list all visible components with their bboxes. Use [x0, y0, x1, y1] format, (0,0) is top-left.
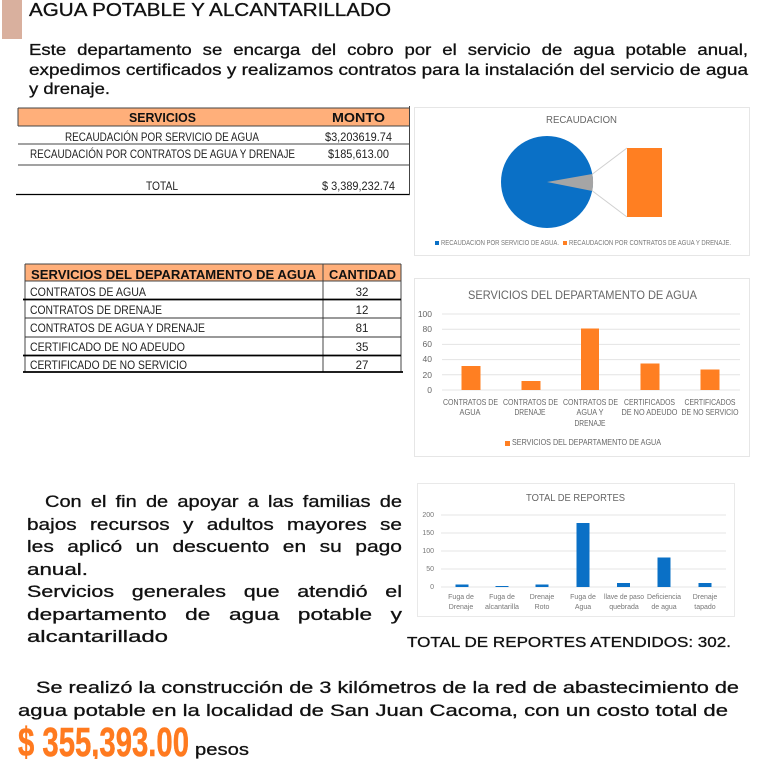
table: servicios y monto: $3,203619.74	[325, 132, 393, 144]
table: servicios del departamento de agua: CONTRATOS DE AGUA	[30, 287, 146, 299]
bar chart: servicios del departamento de agua: 40	[423, 354, 432, 364]
table: servicios del departamento de agua: 32	[356, 287, 368, 299]
bar chart: total de reportes: quebrada	[609, 604, 639, 611]
bar chart: servicios del departamento de agua	[414, 278, 750, 456]
bar chart: servicios del departamento de agua: AGUA	[460, 407, 481, 417]
closing paragraph	[18, 679, 739, 720]
bar chart: servicios del departamento de agua: 60	[423, 339, 432, 349]
bar chart: total de reportes: llave de paso	[604, 594, 644, 601]
intro paragraph: expedimos certificados y realizamos contratos para la instalación del servicio de agua	[29, 62, 748, 79]
pie chart: recaudacion: RECAUDACION POR SERVICIO DE AGUA.	[441, 240, 559, 247]
table: servicios y monto	[16, 106, 410, 195]
bar chart: servicios del departamento de agua: 0	[427, 385, 432, 395]
bar chart: total de reportes: 150	[422, 530, 434, 537]
pie chart: recaudacion	[414, 108, 750, 256]
table: servicios y monto: $185,613.00	[328, 149, 389, 161]
closing paragraph: agua potable en la localidad de San Juan Cacoma, con un costo total de	[18, 702, 728, 720]
table: servicios del departamento de agua: CANTIDAD	[329, 268, 396, 282]
bar chart: total de reportes: Drenaje	[693, 594, 717, 601]
intro paragraph	[29, 42, 748, 98]
table: servicios del departamento de agua: CONTRATOS DE AGUA Y DRENAJE	[30, 323, 205, 335]
text block: apoyo a familias y servicios generales: Con el fin de apoyar a las familias de	[45, 493, 402, 511]
table: servicios del departamento de agua	[23, 264, 403, 372]
bar chart: total de reportes: Fuga de	[489, 594, 515, 601]
bar chart: servicios del departamento de agua: CERTIFICADOS	[624, 397, 675, 407]
pie chart: recaudacion: RECAUDACION POR CONTRATOS DE AGUA Y DRENAJE.	[569, 240, 731, 247]
table: servicios del departamento de agua: 12	[356, 305, 368, 317]
table: servicios del departamento de agua: 27	[356, 360, 368, 372]
bar chart: total de reportes: 100	[422, 548, 434, 555]
bar chart: total de reportes: 200	[422, 512, 434, 519]
table: servicios del departamento de agua: CONTRATOS DE DRENAJE	[30, 305, 162, 317]
bar chart: servicios del departamento de agua: CONTRATOS DE	[503, 397, 558, 407]
table: servicios del departamento de agua: SERVICIOS DEL DEPARATAMENTO DE AGUA	[31, 268, 316, 282]
bar chart: total de reportes: alcantarilla	[485, 604, 519, 611]
title: AGUA POTABLE Y ALCANTARILLADO	[29, 0, 391, 20]
table: servicios y monto: TOTAL	[146, 181, 179, 193]
bar chart: servicios del departamento de agua: DE NO ADEUDO	[622, 407, 678, 417]
bar chart: servicios del departamento de agua: 80	[423, 324, 432, 334]
closing paragraph: Se realizó la construcción de 3 kilómetros de la red de abastecimiento de	[36, 679, 739, 697]
table: servicios y monto: RECAUDACIÓN POR SERVICIO DE AGUA	[65, 131, 259, 144]
bar chart: total de reportes: Deficiencia	[647, 594, 681, 601]
bar chart: servicios del departamento de agua: CONTRATOS DE	[563, 397, 618, 407]
pesos label: pesos	[195, 741, 249, 759]
decorative title tab	[2, 0, 22, 39]
table: servicios y monto: MONTO	[332, 111, 385, 125]
bar chart: servicios del departamento de agua: SERVICIOS DEL DEPARTAMENTO DE AGUA	[512, 437, 661, 447]
intro paragraph: Este departamento se encarga del cobro por el servicio de agua potable anual,	[29, 42, 748, 59]
text block: apoyo a familias y servicios generales: Servicios generales que atendió el	[27, 583, 402, 601]
bar chart: servicios del departamento de agua: CONTRATOS DE	[443, 397, 498, 407]
bar chart: total de reportes: Drenaje	[530, 594, 554, 601]
bar chart: total de reportes: 50	[426, 566, 434, 573]
table: servicios y monto: SERVICIOS	[129, 111, 196, 125]
text block: apoyo a familias y servicios generales: alcantarillado	[27, 628, 168, 646]
bar chart: total de reportes: Agua	[575, 604, 591, 611]
table: servicios y monto: $ 3,389,232.74	[322, 181, 396, 193]
text block: apoyo a familias y servicios generales: departamento de agua potable y	[27, 606, 403, 624]
bar chart: servicios del departamento de agua: DRENAJE	[514, 407, 546, 417]
bar chart: total de reportes: Fuga de	[448, 594, 474, 601]
text block: apoyo a familias y servicios generales: anual.	[27, 561, 88, 579]
total de reportes atendidos: TOTAL DE REPORTES ATENDIDOS: 302.	[407, 634, 731, 651]
bar chart: total de reportes: Drenaje	[449, 604, 473, 611]
bar chart: servicios del departamento de agua: 20	[423, 370, 432, 380]
bar chart: servicios del departamento de agua: 100	[418, 309, 432, 319]
text block: apoyo a familias y servicios generales: les aplicó un descuento en su pago	[27, 538, 402, 556]
bar chart: total de reportes: TOTAL DE REPORTES	[526, 493, 625, 504]
text block: apoyo a familias y servicios generales	[27, 493, 403, 646]
bar chart: servicios del departamento de agua: CERTIFICADOS	[684, 397, 736, 407]
bar chart: servicios del departamento de agua: AGUA Y	[576, 407, 604, 417]
intro paragraph: y drenaje.	[29, 81, 110, 98]
table: servicios del departamento de agua: CERTIFICADO DE NO ADEUDO	[30, 342, 185, 354]
bar chart: total de reportes: de agua	[651, 604, 677, 611]
table: servicios del departamento de agua: 81	[356, 323, 368, 335]
bar chart: total de reportes: Fuga de	[570, 594, 596, 601]
table: servicios del departamento de agua: CERTIFICADO DE NO SERVICIO	[30, 360, 187, 372]
bar chart: servicios del departamento de agua: SERVICIOS DEL DEPARTAMENTO DE AGUA	[468, 288, 697, 302]
table: servicios del departamento de agua: 35	[356, 342, 368, 354]
bar chart: servicios del departamento de agua: DE NO SERVICIO	[682, 407, 739, 417]
bar chart: servicios del departamento de agua: DRENAJE	[574, 418, 606, 428]
bar chart: total de reportes	[418, 484, 734, 616]
table: servicios y monto: RECAUDACIÓN POR CONTRATOS DE AGUA Y DRENAJE	[30, 148, 295, 161]
bar chart: total de reportes: Roto	[535, 604, 549, 611]
bar chart: total de reportes: tapado	[694, 604, 716, 611]
bar chart: total de reportes: 0	[430, 584, 434, 591]
pie chart: recaudacion: RECAUDACION	[546, 115, 617, 126]
text block: apoyo a familias y servicios generales: bajos recursos y adultos mayores se	[27, 516, 402, 534]
